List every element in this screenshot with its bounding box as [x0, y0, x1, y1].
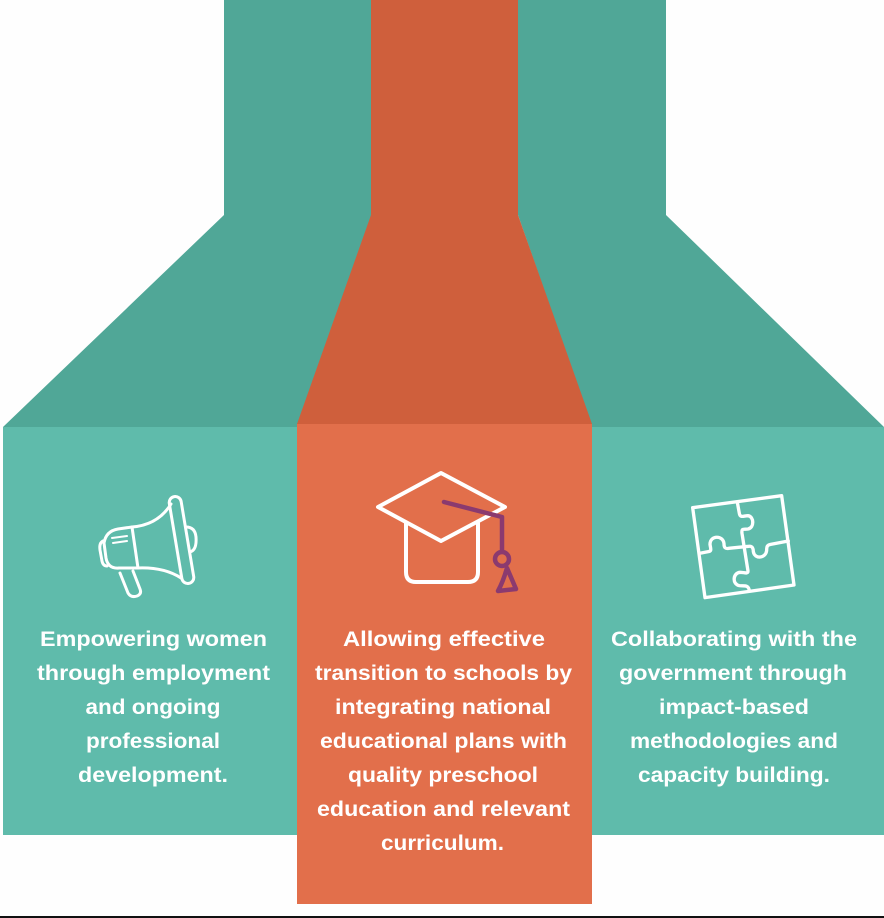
icon: graduation cap: [378, 473, 516, 591]
text: empowering women: through employment: [37, 661, 270, 685]
text: empowering women: [37, 627, 270, 787]
text: collaborating with government: methodologies and: [630, 729, 838, 753]
text: collaborating with government: impact-based: [659, 695, 809, 719]
panel: collaborating with government: [592, 427, 884, 835]
text: effective transition to schools: [315, 627, 572, 855]
text: empowering women: Empowering women: [40, 627, 267, 651]
text: collaborating with government: Collaborating with the: [611, 627, 857, 651]
panel: empowering women: [3, 427, 298, 835]
text: effective transition to schools: education and relevant: [317, 797, 570, 821]
center funnel shape: [297, 0, 592, 424]
text: effective transition to schools: quality preschool: [348, 763, 538, 787]
text: collaborating with government: capacity building.: [638, 763, 830, 787]
icon: megaphone: [100, 496, 196, 597]
text: effective transition to schools: transition to schools by: [315, 661, 572, 685]
left funnel shape: [3, 0, 372, 427]
text: effective transition to schools: integrating national: [335, 695, 551, 719]
text: collaborating with government: government through: [619, 661, 847, 685]
text: empowering women: development.: [78, 763, 228, 787]
text: effective transition to schools: Allowing effective: [343, 627, 545, 651]
text: empowering women: professional: [86, 729, 220, 753]
text: effective transition to schools: educational plans with: [320, 729, 567, 753]
right funnel shape: [518, 0, 884, 427]
text: collaborating with government: [611, 627, 857, 787]
icon: puzzle: [693, 496, 794, 598]
text: effective transition to schools: curriculum.: [381, 831, 504, 855]
panel: effective transition to schools: [297, 424, 592, 904]
text: empowering women: and ongoing: [86, 695, 220, 719]
